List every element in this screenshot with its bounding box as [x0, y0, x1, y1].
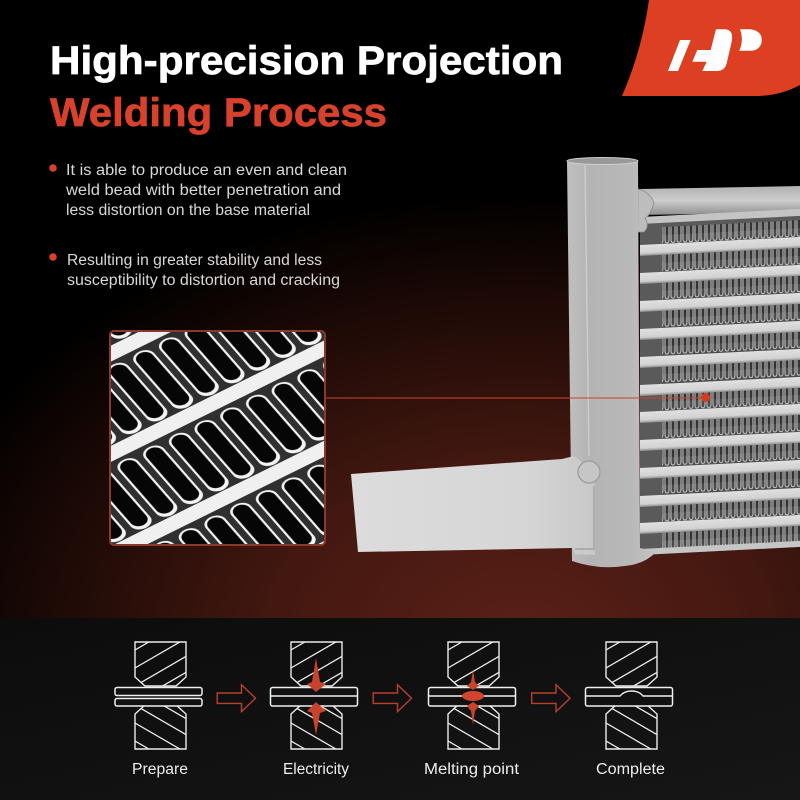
tank opening — [567, 158, 638, 164]
step: complete — [586, 615, 672, 778]
bullet list: Resulting in greater stability and less — [67, 252, 322, 269]
tank — [567, 158, 656, 567]
arrow 3 — [532, 685, 570, 712]
arrow 2 — [373, 685, 412, 712]
step: electricity — [270, 615, 358, 778]
logo badge — [622, 0, 800, 96]
step: melting point: Melting point — [424, 761, 520, 778]
title: Welding Process — [50, 91, 387, 135]
callout line — [326, 393, 710, 402]
step: melting point — [424, 615, 520, 778]
bullet list — [49, 162, 347, 289]
bullet list: It is able to produce an even and clean — [66, 162, 347, 179]
tank seam — [585, 165, 589, 456]
bullet list: less distortion on the base material — [66, 202, 310, 219]
title — [50, 39, 563, 135]
mounting bracket — [351, 456, 600, 555]
inset zoom photo — [110, 331, 325, 545]
weld blob — [638, 189, 654, 232]
bullet list: weld bead with better penetration and — [65, 182, 341, 199]
step: prepare — [115, 615, 202, 778]
bullet list: susceptibility to distortion and cracking — [67, 272, 340, 289]
step: complete: Complete — [596, 761, 665, 778]
title: High-precision Projection — [50, 39, 563, 83]
radiator core — [640, 208, 800, 555]
process panel — [0, 615, 800, 800]
arrow 1 — [217, 685, 256, 712]
step: prepare: Prepare — [132, 761, 188, 778]
radiator product photo — [351, 158, 800, 567]
top tube — [640, 186, 800, 215]
step: electricity: Electricity — [283, 761, 349, 778]
